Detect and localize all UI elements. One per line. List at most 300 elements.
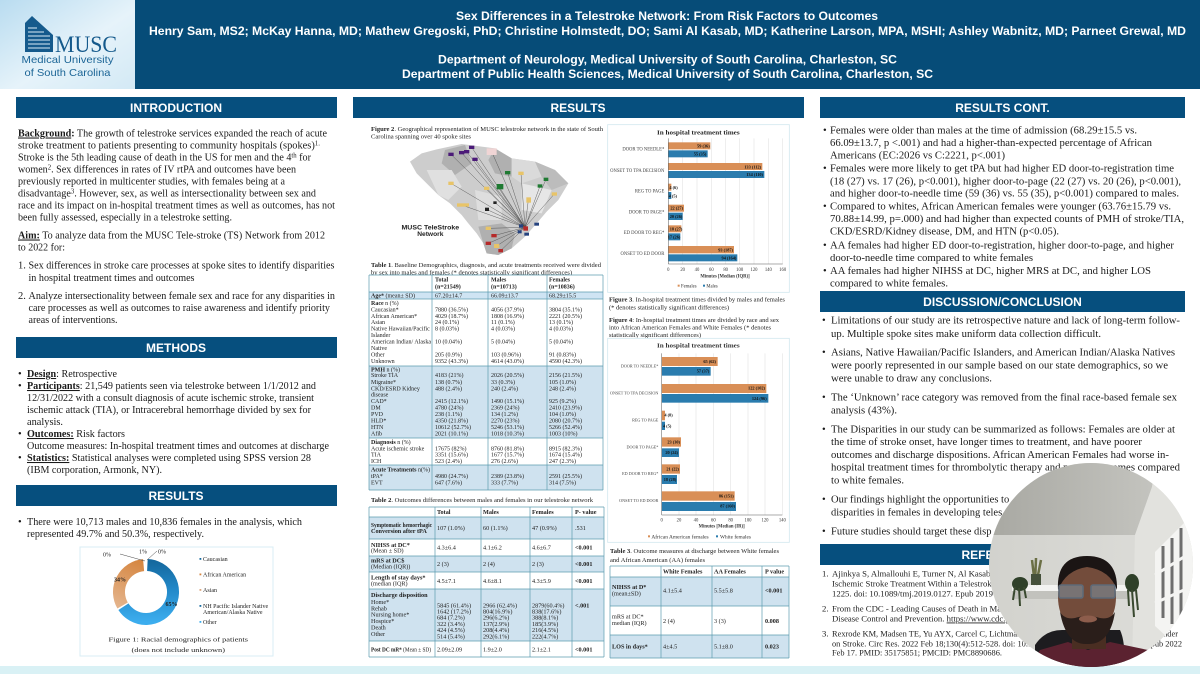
table 1: baseline demographics: 103 (0.96%) <box>491 352 521 358</box>
table 2: outcomes by sex: 2879(60.4%) <box>532 602 564 610</box>
text block: aim: Sex differences in stroke care processes at spoke sites to identify disparities <box>28 260 334 272</box>
table 2: outcomes by sex: 2 (3) <box>437 561 449 568</box>
presenter video circle <box>989 463 1200 667</box>
table 2: outcomes by sex: 4.6±8.1 <box>483 578 502 585</box>
text block: methods list: Outcomes: Risk factors <box>27 429 125 440</box>
table 2: outcomes by sex: Post DC mR* (Mean ± SD) <box>371 646 431 654</box>
figure 2 caption: Carolina spanning over 40 spoke sites <box>371 134 472 140</box>
table 1: baseline demographics: 3804 (35.1%) <box>549 306 582 314</box>
text block: background: disadvantage <box>18 188 73 200</box>
table 2: outcomes by sex: (median (IQR) <box>371 580 408 588</box>
table 1: baseline demographics: (n=10713) <box>491 284 517 290</box>
logo: MUSC: of South Carolina <box>24 67 111 79</box>
text block: methods list: ischemic attack (TIA), or Intracerebral hemorrhage divided by sex for <box>27 405 311 416</box>
figure 2 caption: Figure 2. Geographical representation of MUSC telestroke network in the state of South <box>371 126 604 133</box>
table 1: baseline demographics: Other <box>371 352 385 358</box>
table 1: baseline demographics: 1808 (16.9%) <box>491 313 524 320</box>
table 1: baseline demographics: 17675 (82%) <box>435 446 466 452</box>
text block: discussion: Future studies should target these disp <box>831 526 992 538</box>
table 1: baseline demographics: 2021 (10.1%) <box>435 430 468 438</box>
text block: results continued: and higher door-to-needle time (59 (36) vs. 55 (35), p<0.001) compared to males. <box>830 188 1179 200</box>
table 1: baseline demographics: 2369 (24%) <box>491 404 520 412</box>
text block: references: Disease Control and Prevention. https://www.cdc.g <box>832 614 1010 624</box>
chart: treatment times by sex: 94 (164) <box>722 255 737 260</box>
text block: discussion: to white females. <box>831 476 904 486</box>
table 1: baseline demographics: DM <box>371 406 381 412</box>
map: telestroke network <box>401 144 568 255</box>
heading: results left: RESULTS <box>148 489 204 503</box>
text block: results continued <box>823 126 1184 290</box>
table 2: outcomes by sex: 292(6.1%) <box>483 634 509 640</box>
table 1: baseline demographics: Afib <box>371 430 382 438</box>
table 1: baseline demographics: 2221 (20.5%) <box>549 313 582 320</box>
table 1: baseline demographics: 1018 (10.3%) <box>491 430 524 438</box>
table 1: baseline demographics: HTN <box>371 425 384 431</box>
text block: results continued: (18 (27) vs. 17 (26), p<0.001), higher door-to-page (22 (27) vs. 20 (26), p<0.001), <box>830 176 1181 188</box>
donut chart: racial demographics <box>80 547 273 656</box>
text block: results summary: represented 49.7% and 50.3%, respectively. <box>27 529 204 540</box>
table 1: baseline demographics: 105 (1.0%) <box>549 379 576 386</box>
table 1: baseline demographics: 205 (0.9%) <box>435 352 462 358</box>
figure 3 caption <box>609 296 786 312</box>
neck <box>1072 636 1106 649</box>
chart: treatment times by sex: ED DOOR TO REG* <box>624 231 665 236</box>
legend: race categories: Caucasian <box>203 557 228 563</box>
chart: treatment times by race: REG TO PAGE <box>632 418 659 423</box>
table 1: baseline demographics: Native <box>371 346 387 352</box>
title and authors: Sex Differences in a Telestroke Network: From Risk Factors to Outcomes <box>456 9 878 23</box>
table 1: baseline demographics: 647 (7.6%) <box>435 480 462 486</box>
chart: treatment times by race: 100 <box>745 518 752 523</box>
table 2: outcomes by sex: 185(3.9%) <box>532 621 558 628</box>
table 1: baseline demographics: Native Hawaiian/Pacific <box>371 326 430 332</box>
table 1: baseline demographics: 8 (0.03%) <box>435 326 459 332</box>
table 1: baseline demographics: 4780 (24%) <box>435 404 464 412</box>
table 2: outcomes by sex: Males <box>483 509 499 516</box>
table 1: baseline demographics: 7880 (36.5%) <box>435 306 468 314</box>
heading: results left <box>16 485 337 506</box>
table 1: baseline demographics: 5 (0.04%) <box>491 338 515 346</box>
table 3: outcomes by race: P value <box>765 568 784 576</box>
text block: background: for <box>297 152 311 164</box>
table 1: baseline demographics <box>369 275 603 490</box>
text block: results continued: AA females had higher NIHSS at DC, higher MRS at DC, and higher LOS <box>830 266 1151 277</box>
shirt <box>1038 642 1148 667</box>
figure 3 caption: Figure 3. In-hospital treatment times divided by males and females <box>609 296 786 304</box>
table 1: baseline demographics: 11 (0.1%) <box>491 319 515 326</box>
table 1: baseline demographics: American Indian/ Alaska <box>371 340 431 346</box>
chart: treatment times by race: 86 (151) <box>719 494 734 499</box>
text block: results summary <box>18 517 303 540</box>
table 2: outcomes by sex: <.001 <box>575 602 589 610</box>
title and authors: Henry Sam, MS2; McKay Hanna, MD; Mathew Gregoski, PhD; Christine Holmstedt, DO; Sami Al Kasab, MD; Katherine Larson, MPA, MSHI; Ashley Wabnitz, MD; Parneet Grewal, MD <box>149 24 1186 38</box>
text block: references: 2. <box>822 604 829 614</box>
chart: treatment times by race: African American females <box>651 535 709 540</box>
table 2: outcomes by sex: 2966 (62.4%) <box>483 602 517 610</box>
table 1: baseline demographics: 523 (2.4%) <box>435 458 462 465</box>
chart: treatment times by race: 23 (30) <box>667 439 681 444</box>
chart: treatment times by sex: 22 (27) <box>670 206 684 211</box>
text block: results continued: Americans (EC:2026 vs C:2221, p<.001) <box>830 150 1005 162</box>
table 3: outcomes by race: LOS in days* <box>612 644 648 650</box>
table 2: outcomes by sex: 216(4.5%) <box>532 627 558 634</box>
table 1: baseline demographics: disease <box>371 392 389 398</box>
chart: treatment times by race: 65 (62) <box>703 359 717 364</box>
table 1: baseline demographics: CAD* <box>371 399 387 405</box>
table 2: outcomes by sex: 424 (4.5%) <box>437 627 465 634</box>
chart: treatment times by race: 4 (5) <box>663 423 672 428</box>
text block: aim: 2. <box>18 291 26 302</box>
table 1: baseline demographics: Islander <box>371 333 390 339</box>
text block: results continued: door-to-needle time compared to white females <box>830 253 1033 264</box>
table 2: outcomes by sex: 838(17.6%) <box>532 608 561 616</box>
text block: references: 3. <box>822 628 829 638</box>
table 1: baseline demographics: Age* (mean± SD) <box>371 292 415 300</box>
table 1: baseline demographics: 91 (0.83%) <box>549 352 576 358</box>
text block: results continued: AA females had higher ED door-to-registration, higher door-to-page, and higher <box>830 240 1175 252</box>
table 2: outcomes by sex: 684 (7.2%) <box>437 614 465 622</box>
figure 4 caption: Figure 4: In-hospital treatment times are divided by race and sex <box>609 317 780 324</box>
title and authors: Department of Public Health Sciences, Medical University of South Carolina, Charleston, SC <box>402 67 933 81</box>
text block: discussion: Limitations of our study are its retrospective nature and lack of long-term follow- <box>831 316 1181 326</box>
table 1: baseline demographics: Stroke TIA <box>371 373 399 379</box>
chart: treatment times by sex: 18 (27) <box>670 226 683 231</box>
table 1: baseline demographics: (n=21549) <box>435 284 461 290</box>
legend: race categories: American/Alaska Native <box>203 610 263 616</box>
heading: results center <box>353 97 804 118</box>
figure 1 caption: (does not include unknown) <box>132 647 225 654</box>
table 1: baseline demographics: African American* <box>371 313 417 320</box>
text block: background: th <box>291 152 297 160</box>
text block: methods list: • <box>18 453 22 464</box>
table 1: baseline demographics: (n=10836) <box>549 284 575 290</box>
table 1: baseline demographics: TIA <box>371 452 382 458</box>
table 2: outcomes by sex: Death <box>371 624 387 632</box>
text block: discussion: Our findings highlight the opportunities to <box>831 494 1009 506</box>
figure 3 caption: (* denotes statistically significant differences) <box>609 304 729 312</box>
table 1: baseline demographics: 8760 (81.8%) <box>491 446 524 452</box>
table 3: outcomes by race: median (IQR) <box>612 620 647 627</box>
text block: discussion: The ‘Unknown’ race category was removed from the final race-based female sex <box>831 392 1178 404</box>
chart: treatment times by race: Minutes [Median (IR)] <box>699 524 745 529</box>
table 1: baseline demographics: Females <box>549 278 571 284</box>
table 1: baseline demographics: 4056 (37.9%) <box>491 306 524 314</box>
text block: aim <box>18 230 336 326</box>
chart: treatment times by sex: Females <box>681 284 697 289</box>
chart: treatment times by sex: 17 (26) <box>668 234 681 239</box>
table 2: outcomes by sex: Conversion after tPA <box>371 528 427 535</box>
table 1: baseline demographics: 2591 (25.5%) <box>549 473 582 480</box>
table 3: outcomes by race: White Females <box>663 568 703 576</box>
table 1: baseline demographics: 4980 (24.7%) <box>435 473 468 480</box>
table 1: baseline demographics: Acute ischemic stroke <box>371 446 425 452</box>
table 2: outcomes by sex: 4.3±6.4 <box>437 544 456 552</box>
text block: methods list: Outcome measures: In-hospital treatment times and outcomes at discharge <box>27 441 329 452</box>
chart: treatment times by race: 60 <box>711 518 716 523</box>
table 2: outcomes by sex: 47 (0.9%) <box>532 525 557 532</box>
table 2: outcomes by sex: Discharge disposition <box>371 592 428 599</box>
table 2: outcomes by sex: (Median (IQR)) <box>371 564 410 570</box>
table 2: outcomes by sex: 1642 (17.2%) <box>437 608 471 616</box>
table 1: baseline demographics: 2156 (21.5%) <box>549 372 582 379</box>
text block: background: previously reported in multicenter studies, with females being at a <box>18 176 285 188</box>
footer band <box>0 666 1200 674</box>
text block: references: on Stroke. Circ Res. 2022 Feb 18;130(4):512-528. doi: 10.1161/CIRCRESAHA.121.319915. Epub 2022 <box>832 638 1182 648</box>
donut chart: racial demographics: 1% <box>139 550 147 556</box>
text block: methods list <box>18 369 329 476</box>
text block: discussion: disparities in females in developing teles <box>831 508 1002 518</box>
text block: aim: 1. <box>18 260 26 272</box>
table 1: baseline demographics: 10612 (52.7%) <box>435 424 471 431</box>
text block: background: race and its impact on in-hospital treatment times as well as outcomes, has not <box>18 200 335 212</box>
chart: treatment times by sex: 20 <box>680 268 686 273</box>
table 1: baseline demographics: Asian <box>371 320 385 326</box>
table 3: outcomes by race <box>610 566 789 658</box>
text block: methods list: • <box>18 369 22 380</box>
logo: MUSC: Medical University <box>22 54 114 66</box>
table 2: outcomes by sex: 296(6.2%) <box>483 614 509 622</box>
chart: treatment times by race: 20 (24) <box>665 450 679 455</box>
table 1: baseline demographics: 4350 (21.8%) <box>435 418 468 424</box>
table 1: baseline demographics: 314 (7.5%) <box>549 480 576 486</box>
text block: results continued: • <box>823 240 827 252</box>
text block: references <box>822 568 1182 658</box>
table 3: outcomes by race: 2 (4) <box>663 618 675 625</box>
text block: background: 3 <box>71 188 75 196</box>
text block: background: Background: The growth of telestroke services expanded the reach of acute <box>18 128 327 140</box>
table 1: baseline demographics: HLD* <box>371 418 386 424</box>
text block: discussion: • <box>822 348 826 358</box>
heading: methods: METHODS <box>146 341 206 355</box>
table 2: outcomes by sex: 4.3±5.9 <box>532 578 551 585</box>
table 2: outcomes by sex: (Mean ± SD) <box>371 548 404 554</box>
chart: treatment times by sex: ONSET TO ED DOOR <box>620 252 665 257</box>
figure 4 caption: into African American Females and White Females (* denotes <box>609 324 772 332</box>
heading: results continued <box>820 97 1185 118</box>
table 2: outcomes by sex: 2.1±2.1 <box>532 646 551 654</box>
chart: treatment times by sex: 20 (26) <box>670 214 683 219</box>
table 3: outcomes by race: mRS at DC* <box>612 614 644 620</box>
table 3: outcomes by race: 5.5±5.8 <box>714 588 733 594</box>
text block: discussion: • <box>822 316 826 326</box>
text block: results continued: Females were older than males at the time of admission (68.29±15.5 vs. <box>830 126 1137 136</box>
table 1: baseline demographics: 68.29±15.5 <box>549 294 576 300</box>
logo: MUSC <box>0 0 135 89</box>
figure 2 caption <box>371 126 604 140</box>
chart: treatment times by sex <box>608 125 789 292</box>
table 1: baseline demographics: Race n (%) <box>371 300 399 307</box>
chart: treatment times by race: 124 (96) <box>752 396 767 401</box>
table 1: baseline demographics: 66.09±13.7 <box>491 294 518 300</box>
text block: methods list: analysis. <box>27 417 63 428</box>
table 1: baseline demographics: Total <box>435 278 448 284</box>
chart: treatment times by race: DOOR TO PAGE* <box>627 444 658 449</box>
table 2: outcomes by sex: mRS at DC$ <box>371 558 404 564</box>
chart: treatment times by race: ONSET TO ED DOOR <box>619 498 659 503</box>
table 1: baseline demographics: 2410 (23.9%) <box>549 404 582 412</box>
table 3: outcomes by race: 3 (3) <box>714 618 726 625</box>
table 2: outcomes by sex: Length of stay days* <box>371 574 426 582</box>
table 2: outcomes by sex <box>369 507 604 657</box>
text block: results continued: CKD/ESRD/Kidney disease, DM, and HTN (p<0.05). <box>830 226 1059 238</box>
text block: results continued: • <box>823 202 827 212</box>
table 3: outcomes by race: 0.023 <box>765 644 779 650</box>
table 1: baseline demographics: 10 (0.04%) <box>435 338 462 346</box>
table 2: outcomes by sex: <0.001 <box>575 561 592 568</box>
table 1: baseline demographics: 4 (0.03%) <box>549 326 573 332</box>
text block: discussion: hospital treatment times for thrombolytic therapy and poorer outcomes compared <box>831 462 1181 474</box>
chart: treatment times by sex: DOOR TO NEEDLE* <box>622 148 665 153</box>
table 1: baseline demographics: 248 (2.4%) <box>549 386 576 392</box>
text block: aim: care processes as well as outcomes to raise awareness and identify priority <box>28 303 331 314</box>
heading: introduction <box>16 97 337 118</box>
donut chart: racial demographics: 34% <box>114 578 126 584</box>
heading: discussion <box>820 291 1185 312</box>
table 2: outcomes by sex: Total <box>437 509 451 516</box>
chart: treatment times by sex: 80 <box>723 268 729 273</box>
text block: background: women <box>18 164 49 176</box>
chart: treatment times by sex: 4 (5) <box>669 193 678 198</box>
heading: references <box>820 544 1185 565</box>
donut chart: racial demographics: 0% <box>158 550 166 556</box>
chart: treatment times by sex: 93 (187) <box>718 247 734 252</box>
chart: treatment times by race <box>608 338 789 542</box>
table 1: baseline demographics: PVD <box>371 412 384 418</box>
table 1: baseline demographics: 4 (0.03%) <box>491 326 515 332</box>
logo: MUSC: MUSC <box>55 32 117 57</box>
chair <box>1035 630 1125 667</box>
table 1: baseline demographics: 4590 (42.3%) <box>549 358 582 365</box>
heading: results continued: RESULTS CONT. <box>955 101 1050 115</box>
table 2: outcomes by sex: 222(4.7%) <box>532 634 558 640</box>
chart: treatment times by sex: Minutes [Median (IQR)] <box>700 274 750 279</box>
chart: treatment times by race: ONSET TO TPA DECISION <box>610 391 658 396</box>
table 2: outcomes by sex: Rehab <box>371 606 387 612</box>
table 3: outcomes by race: 5.1±8.0 <box>714 644 733 650</box>
text block: methods list: 12/31/2022 with a consult diagnosis of acute ischemic stroke, transient <box>27 393 314 404</box>
text block: background: 2 <box>48 164 52 172</box>
text block: discussion: • <box>822 424 826 436</box>
text block: background: Stroke is the 5th leading cause of death in the US for men and the 4 <box>18 152 302 164</box>
table 1: baseline demographics: 2080 (20.7%) <box>549 418 582 424</box>
table 1: baseline demographics: tPA* <box>371 474 383 480</box>
table 2: outcomes by sex: Symptomatic hemorrhagic <box>371 522 432 529</box>
text block: discussion <box>822 316 1181 538</box>
table 1: baseline demographics: 240 (2.4%) <box>491 386 518 392</box>
table 1 caption: by sex into males and females (* denotes statistically significant differences) <box>371 269 572 276</box>
text block: discussion: analysis (43%). <box>831 406 897 416</box>
table 2: outcomes by sex: 2.09±2.09 <box>437 646 462 654</box>
table 1: baseline demographics: 13 (0.1%) <box>549 319 573 326</box>
text block: background <box>18 128 335 224</box>
text block: results continued: • <box>823 266 827 277</box>
text block: methods list: Participants: 21,549 patients seen via telestroke between 1/1/2012 and <box>27 381 317 392</box>
chart: treatment times by race: 0 <box>661 518 664 523</box>
table 1: baseline demographics: 104 (1.0%) <box>549 411 576 418</box>
table 1: baseline demographics: 1674 (15.4%) <box>549 452 582 458</box>
text block: aim: in hospital treatment times and outcomes <box>28 273 194 284</box>
table 2: outcomes by sex: 208(4.4%) <box>483 627 509 634</box>
figure 4 caption <box>609 317 780 339</box>
table 1: baseline demographics: EVT <box>371 480 383 486</box>
text block: results continued: compared to white females. <box>830 278 948 290</box>
text block: background: been fully assessed, especially in a telestroke setting. <box>18 212 232 224</box>
chart: treatment times by sex: 134 (110) <box>746 172 764 177</box>
chart: treatment times by sex: Males <box>706 284 718 289</box>
figure 1 caption <box>108 636 249 654</box>
table 1: baseline demographics: 2270 (23%) <box>491 418 520 424</box>
table 1: baseline demographics: Males <box>491 278 507 284</box>
table 3: outcomes by race: AA Females <box>714 568 746 576</box>
text block: methods list: Statistics: Statistical analyses were completed using SPSS version 28 <box>27 453 311 464</box>
map: telestroke network: Network <box>417 231 444 238</box>
table 3: outcomes by race: 4.1±5.4 <box>663 588 682 594</box>
table 1: baseline demographics: 1003 (10%) <box>549 430 578 438</box>
chart: treatment times by race: DOOR TO NEEDLE* <box>621 364 658 369</box>
text block: references: Ajinkya S, Almallouhi E, Turner N, Al Kasab S <box>832 568 997 578</box>
legend: race categories <box>200 557 268 626</box>
text block: results continued: 70.88±14.99, p=.000) and had higher than expected counts of PMH of stroke/TIA, <box>830 214 1184 225</box>
text block: discussion: up. Multiple spoke sites make uniform data collection difficult. <box>831 329 1101 340</box>
table 1: baseline demographics: 5 (0.04%) <box>549 338 573 346</box>
table 1: baseline demographics: ICH <box>371 459 382 465</box>
table 1: baseline demographics: Diagnosis n (%) <box>371 439 411 446</box>
chart: treatment times by sex: 60 <box>709 268 714 273</box>
text block: discussion: • <box>822 526 826 538</box>
chart: treatment times by race: 20 <box>677 518 682 523</box>
table 2: outcomes by sex: 1.9±2.0 <box>483 646 502 654</box>
chart: treatment times by sex: 160 <box>779 268 787 273</box>
window door <box>1154 523 1193 635</box>
table 1: baseline demographics: 5246 (53.1%) <box>491 424 524 431</box>
table 1: baseline demographics: 9352 (43.3%) <box>435 358 468 365</box>
text block: background: stroke treatment to patients presenting to community hospitals (spokes) <box>18 140 318 152</box>
table 1: baseline demographics: PMH n (%) <box>371 366 400 374</box>
text block: background: 1. <box>315 140 320 148</box>
chart: treatment times by race: 120 <box>762 518 769 523</box>
table 3: outcomes by race: (mean±SD) <box>612 590 641 598</box>
chart: treatment times by race: 80 <box>728 518 734 523</box>
text block: results continued: Compared to whites, African American females were younger (63.76±15.79 vs. <box>830 202 1171 212</box>
table 1: baseline demographics: 276 (2.6%) <box>491 458 518 465</box>
chart: treatment times by sex: 140 <box>765 268 772 273</box>
chart: treatment times by sex: 0 <box>667 268 670 273</box>
chart: treatment times by sex: 100 <box>736 268 744 273</box>
table 2: outcomes by sex: 2 (4) <box>483 561 495 568</box>
figure 1 caption: Figure 1: Racial demographics of patients <box>108 636 249 644</box>
text block: methods list: Design: Retrospective <box>27 369 117 380</box>
table 3: outcomes by race: NIHSS at D* <box>612 584 646 591</box>
legend: race categories: Other <box>203 620 217 626</box>
table 3 caption <box>610 548 780 564</box>
chart: treatment times by sex: In hospital treatment times <box>657 129 740 136</box>
text block: discussion: • <box>822 392 826 404</box>
table 2: outcomes by sex: 322 (3.4%) <box>437 621 465 628</box>
text block: methods list: • <box>18 381 22 392</box>
text block: references: Rexrode KM, Madsen TE, Yu AYX, Carcel C, Lichtman JH, Miller EC. The Impact of Sex and Gender <box>832 628 1178 638</box>
bars: females <box>668 142 762 253</box>
chart: treatment times by sex: 55 (35) <box>694 151 707 156</box>
legend: race categories: Asian <box>203 588 217 594</box>
chart: treatment times by sex: 133 (112) <box>744 164 762 169</box>
chart: treatment times by sex: ONSET TO TPA DECISION <box>610 169 665 174</box>
text block: discussion: Asians, Native Hawaiian/Pacific Islanders, and American Indian/Alaska Natives <box>831 348 1175 358</box>
table 3: outcomes by race: 0.008 <box>765 618 779 625</box>
text block: methods list: (IBM corporation, Armonk, NY). <box>27 465 162 476</box>
table 1: baseline demographics: 488 (2.4%) <box>435 386 462 392</box>
table 2: outcomes by sex: Home* <box>371 599 389 606</box>
table 1: baseline demographics: Acute Treatments n(%) <box>371 466 430 474</box>
